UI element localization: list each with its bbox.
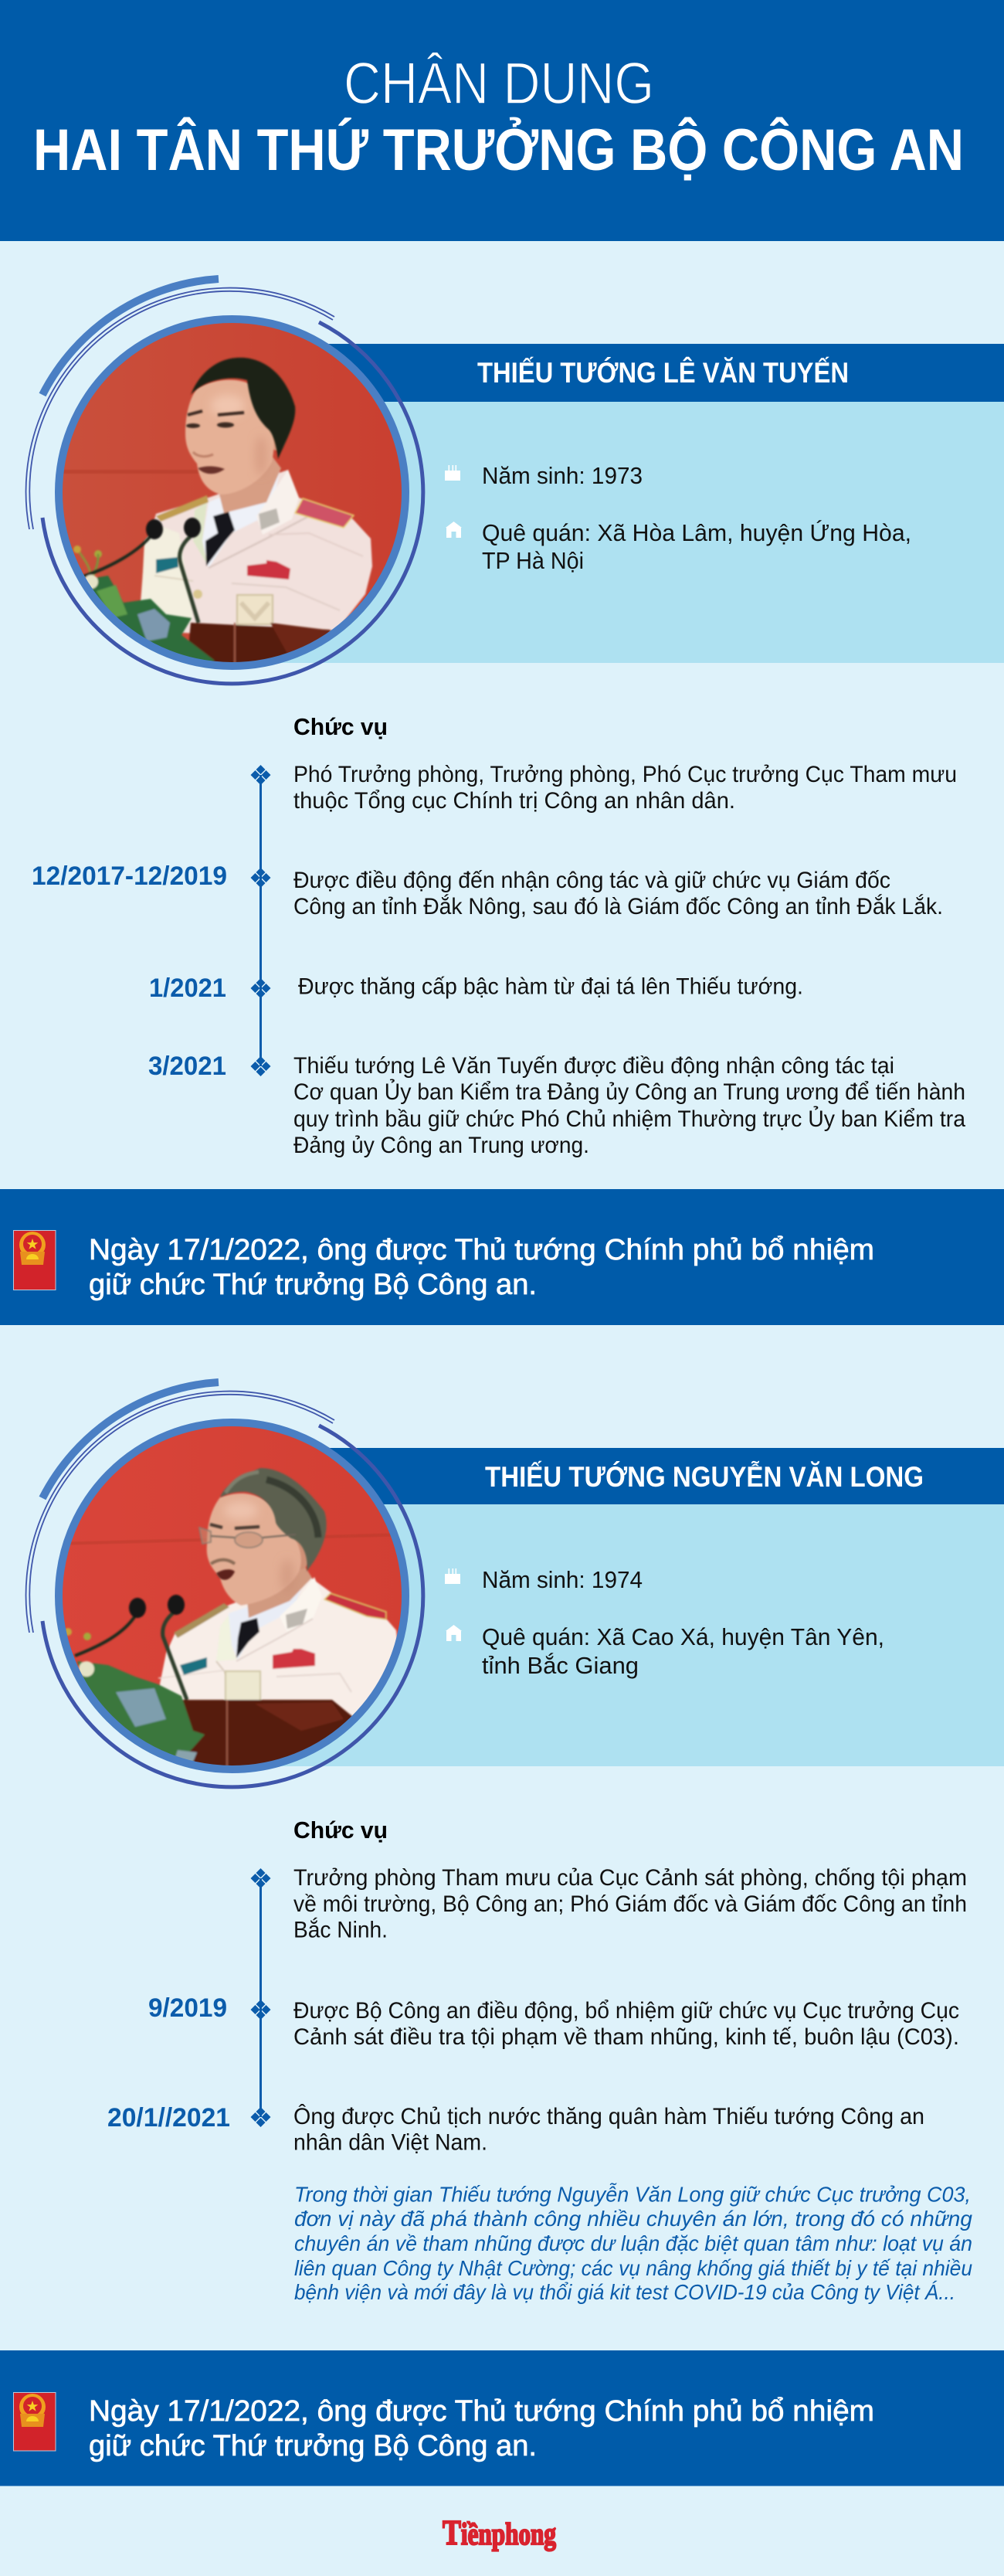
timeline axis — [259, 775, 262, 1066]
italic note: bệnh viện và mới đây là vụ thổi giá kit test COVID-19 của Công ty Việt Á... — [294, 2280, 955, 2304]
callout text: giữ chức Thứ trưởng Bộ Công an. — [89, 2430, 537, 2462]
portrait photo 1 — [63, 323, 402, 662]
panel: profile Nguyễn Văn Long — [232, 1448, 1004, 1766]
hometown — [482, 519, 911, 574]
panel: profile Lê Văn Tuyến — [232, 344, 1004, 663]
dark arc — [42, 1426, 423, 1787]
name badge — [180, 1657, 207, 1675]
shoulder board right — [295, 498, 354, 528]
neck — [247, 1561, 312, 1618]
logo: Tiền Phong: Tiềnphong — [443, 2513, 556, 2552]
brows and mouth — [210, 1524, 259, 1528]
necktie — [236, 1618, 259, 1658]
name bar — [232, 1448, 1004, 1504]
entry 4 text: quy trình bầu giữ chức Phó Chủ nhiệm Thường trực Ủy ban Kiểm tra — [293, 1106, 966, 1132]
shoulder board left — [174, 1603, 229, 1638]
entry 3 text: Được thăng cấp bậc hàm từ đại tá lên Thiếu tướng. — [298, 974, 803, 1000]
hometown: TP Hà Nội — [482, 547, 584, 574]
italic note: Trong thời gian Thiếu tướng Nguyễn Văn Long giữ chức Cục trưởng C03, — [294, 2182, 971, 2207]
collar right — [280, 1576, 317, 1616]
ear — [273, 437, 278, 451]
entry 2 text: Được Bộ Công an điều động, bổ nhiệm giữ chức vụ Cục trưởng Cục — [293, 1998, 959, 2024]
marker 1 — [250, 1868, 270, 1888]
marker 2 — [250, 2000, 270, 2020]
entry 1 text — [293, 1865, 967, 1942]
name badge — [156, 557, 178, 573]
collar badge — [286, 1609, 307, 1629]
entry 2 text — [293, 1998, 959, 2050]
necktie — [205, 511, 235, 566]
outer thick arc — [42, 1382, 219, 1498]
header banner — [0, 0, 1004, 241]
icon: house — [446, 1625, 462, 1641]
hometown: tỉnh Bắc Giang — [482, 1652, 639, 1679]
birth year: Năm sinh: 1974 — [482, 1566, 643, 1593]
icon: birthday cake — [445, 465, 460, 481]
callout text: giữ chức Thứ trưởng Bộ Công an. — [89, 1269, 537, 1301]
button — [193, 590, 202, 599]
entry 2 text: Được điều động đến nhận công tác và giữ chức vụ Giám đốc — [293, 868, 890, 893]
name: THIẾU TƯỚNG NGUYỄN VĂN LONG — [485, 1460, 924, 1493]
foliage — [92, 575, 215, 661]
jacket — [139, 470, 372, 641]
foliage — [77, 1661, 205, 1769]
entry 1 text: Trưởng phòng Tham mưu của Cục Cảnh sát phòng, chống tội phạm — [293, 1865, 967, 1891]
flowers back — [78, 552, 92, 573]
entry 1 text: về môi trường, Bộ Công an; Phó Giám đốc và Giám đốc Công an tỉnh — [293, 1891, 967, 1917]
hometown: Quê quán: Xã Cao Xá, huyện Tân Yên, — [482, 1623, 884, 1650]
portrait photo 2 — [63, 1426, 402, 1765]
entry 3 date: 20/1//2021 — [107, 2103, 230, 2133]
title line 1: CHÂN DUNG — [344, 51, 654, 117]
section heading: Chức vụ — [293, 1816, 388, 1844]
entry 4 text — [293, 1053, 966, 1158]
portrait ring — [59, 319, 405, 666]
entry 2 date: 12/2017-12/2019 — [32, 861, 227, 891]
entry 3 date: 1/2021 — [149, 974, 226, 1003]
glasses — [199, 1528, 263, 1548]
shoulder board left — [156, 495, 209, 522]
timeline: Nguyễn Văn Long — [107, 1816, 972, 2304]
hair — [220, 1468, 327, 1572]
collar right — [256, 470, 299, 535]
microphones — [75, 1615, 136, 1656]
lapels — [209, 516, 309, 568]
callout text — [89, 2395, 874, 2462]
italic note: liên quan Công ty Nhật Cường; các vụ nâng khống giá thiết bị y tế tại nhiều — [294, 2256, 972, 2280]
portrait: Lê Văn Tuyến — [26, 279, 423, 684]
brows, eyes, mouth — [188, 411, 244, 415]
entry 4 date: 3/2021 — [148, 1052, 226, 1081]
outer double arc — [26, 1392, 334, 1633]
hometown: Quê quán: Xã Hòa Lâm, huyện Ứng Hòa, — [482, 519, 911, 546]
icon: national emblem flag — [14, 1230, 56, 1290]
dark arc — [42, 322, 423, 684]
shirt — [202, 468, 280, 568]
entry 1 text: Bắc Ninh. — [293, 1918, 388, 1942]
section heading: Chức vụ — [293, 713, 388, 740]
callout text: Ngày 17/1/2022, ông được Thủ tướng Chính phủ bổ nhiệm — [89, 2395, 874, 2428]
marker 3 — [250, 978, 270, 998]
collar badge — [259, 508, 280, 530]
glass — [237, 595, 273, 624]
lectern — [180, 1700, 353, 1777]
outer double arc — [26, 288, 334, 529]
birth year: Năm sinh: 1973 — [482, 462, 643, 489]
entry 2 text — [293, 868, 943, 919]
marker 3 — [250, 2107, 270, 2127]
icon: birthday cake — [445, 1568, 460, 1584]
callout banner 2 — [0, 2350, 1004, 2486]
portrait ring — [59, 1422, 405, 1769]
lectern — [188, 621, 331, 662]
marker 4 — [250, 1056, 270, 1076]
entry 3 text — [293, 2103, 924, 2156]
timeline: Lê Văn Tuyến — [32, 713, 966, 1158]
glass — [226, 1671, 260, 1701]
icon: house — [446, 522, 462, 538]
ear — [295, 1539, 307, 1568]
callout banner 1 — [0, 1189, 1004, 1325]
info panel background — [232, 1504, 1004, 1766]
entry 2 date: 9/2019 — [148, 1993, 227, 2023]
name bar — [232, 344, 1004, 402]
marker 1 — [250, 765, 270, 785]
shirt — [229, 1592, 300, 1658]
icon: national emblem flag — [14, 2392, 56, 2451]
shoulder board right — [324, 1593, 386, 1619]
entry 1 text — [293, 762, 957, 814]
hair — [191, 358, 295, 459]
flowers back — [83, 1633, 91, 1640]
medals — [247, 560, 290, 579]
entry 4 text: Đảng ủy Công an Trung ương. — [293, 1133, 589, 1158]
jacket — [154, 1576, 405, 1723]
entry 2 text: Cảnh sát điều tra tội phạm về tham nhũng, kinh tế, buôn lậu (C03). — [293, 2024, 959, 2050]
entry 1 text: Phó Trưởng phòng, Trưởng phòng, Phó Cục trưởng Cục Tham mưu — [293, 762, 957, 787]
entry 4 text: Cơ quan Ủy ban Kiểm tra Đảng ủy Công an Trung ương để tiến hành — [293, 1079, 965, 1105]
marker 2 — [250, 868, 270, 888]
entry 2 text: Công an tỉnh Đắk Nông, sau đó là Giám đốc Công an tỉnh Đắk Lắk. — [293, 894, 943, 919]
microphones — [83, 533, 153, 576]
italic note: đơn vị này đã phá thành công nhiều chuyên án lớn, trong đó có những — [294, 2207, 972, 2231]
portrait: Nguyễn Văn Long — [26, 1382, 423, 1787]
italic note — [294, 2182, 972, 2304]
entry 3 text: Ông được Chủ tịch nước thăng quân hàm Thiếu tướng Công an — [293, 2103, 924, 2129]
callout text: Ngày 17/1/2022, ông được Thủ tướng Chính phủ bổ nhiệm — [89, 1234, 874, 1266]
face — [207, 1494, 301, 1606]
entry 3 text: nhân dân Việt Nam. — [293, 2129, 487, 2156]
timeline axis — [259, 1878, 262, 2117]
medals — [273, 1649, 315, 1669]
info panel background — [232, 402, 1004, 663]
callout text — [89, 1234, 874, 1301]
outer thick arc — [42, 279, 219, 395]
italic note: chuyên án về tham nhũng được dư luận đặc biệt quan tâm như: loạt vụ án — [294, 2231, 972, 2255]
hometown — [482, 1623, 884, 1679]
entry 4 text: Thiếu tướng Lê Văn Tuyến được điều động nhận công tác tại — [293, 1053, 894, 1079]
neck — [218, 456, 281, 513]
name: THIẾU TƯỚNG LÊ VĂN TUYẾN — [477, 356, 849, 389]
face — [185, 380, 274, 494]
entry 1 text: thuộc Tổng cục Chính trị Công an nhân dân. — [293, 788, 735, 814]
lapels — [236, 1619, 313, 1661]
